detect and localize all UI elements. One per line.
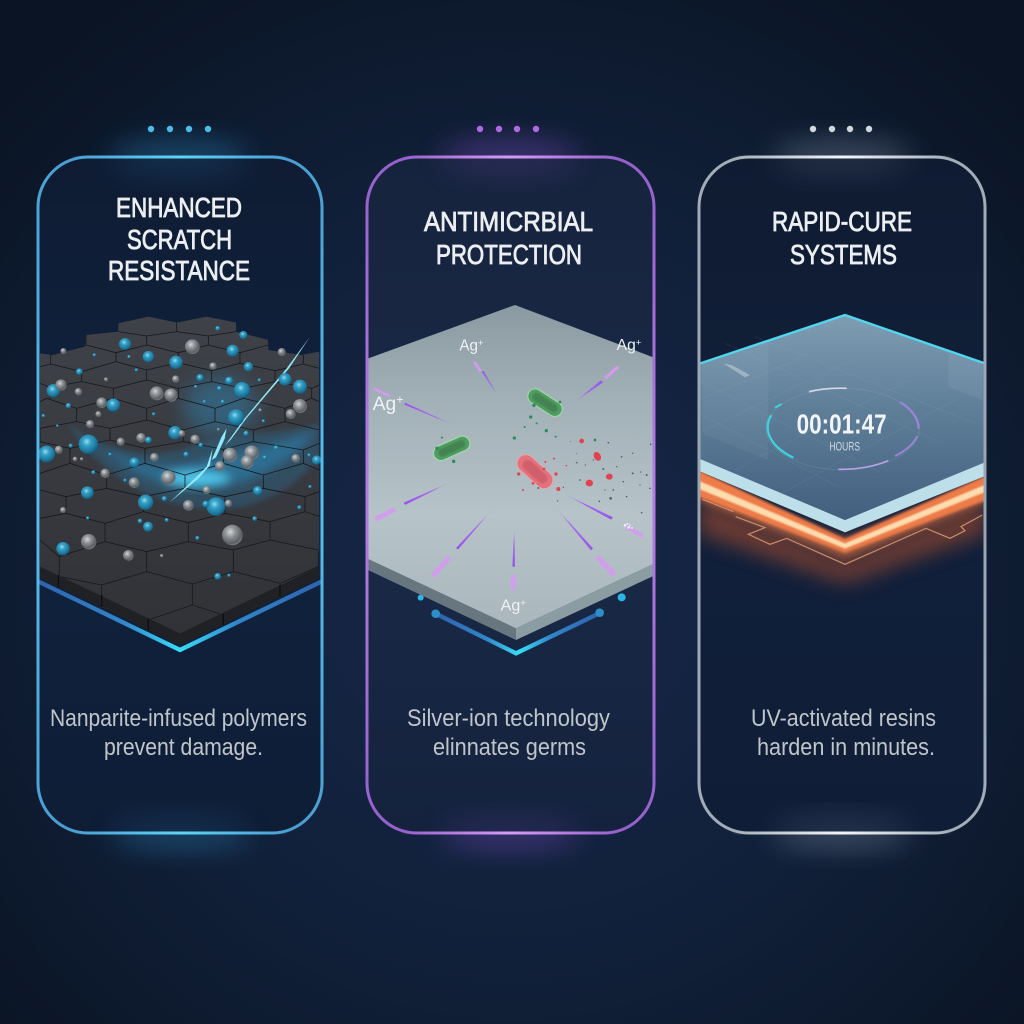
panel: enhanced scratch resistance <box>37 126 323 852</box>
blue nanoparticles <box>38 326 321 580</box>
description: Silver-ion technology <box>407 705 610 732</box>
Ag+ labels: + <box>520 598 526 608</box>
silver ion rays <box>373 362 643 590</box>
card background <box>38 137 322 852</box>
chevron accent with nodes <box>418 593 626 653</box>
hexagon plate side <box>40 567 319 645</box>
red bacterium <box>516 454 554 489</box>
Ag+ labels: + <box>478 338 483 348</box>
Ag+ labels: + <box>636 337 641 347</box>
title <box>772 206 912 270</box>
Ag+ labels: + <box>396 392 403 406</box>
timer ring <box>766 388 919 470</box>
description <box>407 705 610 761</box>
panel: antimicrobial protection <box>367 126 654 852</box>
chevron accent <box>37 581 323 650</box>
silver nanoparticles <box>55 339 307 561</box>
description <box>50 705 307 761</box>
plate top <box>367 305 653 628</box>
glass rim <box>698 457 987 532</box>
description: elinnates germs <box>433 734 586 761</box>
panel: rapid-cure systems <box>698 126 987 852</box>
Ag+ labels: Ag <box>501 598 519 615</box>
Ag+ labels: Ag <box>617 337 635 354</box>
card border <box>699 156 985 834</box>
title: PROTECTION <box>436 239 582 270</box>
description: prevent damage. <box>104 734 263 761</box>
title: ANTIMICRBIAL <box>424 206 593 237</box>
illustration: layered curing panel with timer <box>698 315 987 583</box>
green bacterium <box>527 388 563 417</box>
green bacterium <box>433 436 470 461</box>
countdown time: 00:01:47 <box>797 408 887 439</box>
title <box>108 192 250 286</box>
indicator dots <box>477 126 539 132</box>
card background <box>367 137 654 852</box>
card background <box>699 137 985 852</box>
Ag+ labels: Ag <box>459 338 478 355</box>
description: UV-activated resins <box>751 705 936 732</box>
title: RAPID-CURE <box>772 206 912 237</box>
title: SYSTEMS <box>790 239 897 270</box>
card border <box>367 156 654 834</box>
description: harden in minutes. <box>757 734 935 761</box>
debris particles <box>435 401 651 513</box>
indicator dots <box>148 126 211 132</box>
Ag+ labels <box>373 337 641 615</box>
title: RESISTANCE <box>108 255 250 286</box>
Ag+ labels: Ag <box>373 394 396 415</box>
glass plate top <box>698 315 987 520</box>
title <box>424 206 593 270</box>
hours label: HOURS <box>829 440 860 454</box>
plate side <box>367 558 653 640</box>
title: ENHANCED <box>116 192 242 223</box>
title: SCRATCH <box>127 224 232 255</box>
indicator dots <box>810 126 872 132</box>
orange under-glow <box>698 490 987 583</box>
description: Nanparite-infused polymers <box>50 705 307 732</box>
illustration: silver-ion plate with bacteria <box>367 305 653 653</box>
circuit traces <box>702 499 982 564</box>
illustration: hexagonal surface with nanoparticles <box>37 313 323 650</box>
heated orange layers <box>698 470 987 553</box>
hexagon plate top <box>37 313 323 637</box>
scratch mark <box>169 337 310 503</box>
description <box>751 705 936 761</box>
card border <box>38 156 322 834</box>
